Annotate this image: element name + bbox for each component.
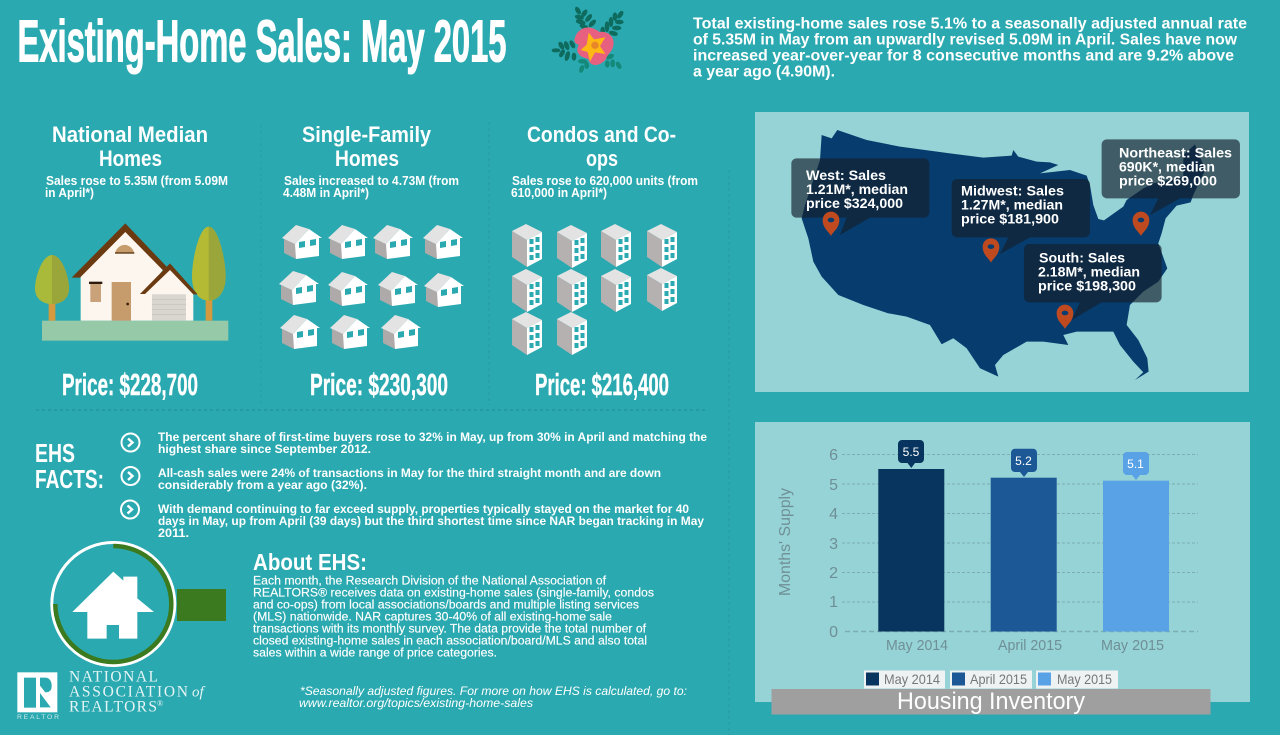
label: northeast: price $269,000	[1119, 174, 1217, 188]
heading: Homes	[99, 146, 162, 171]
association name: NATIONAL	[69, 669, 158, 686]
panel: condos and co-ops	[511, 122, 698, 402]
intro text: Total existing-home sales rose 5.1% to a seasonally adjusted annual rate	[693, 16, 1247, 32]
heading	[527, 122, 676, 171]
icon: house in ring	[52, 542, 226, 666]
footnote: www.realtor.org/topics/existing-home-sales	[299, 696, 533, 710]
panel: about EHS	[253, 549, 654, 660]
price: Price: $230,300	[310, 367, 448, 402]
bar: May 2015	[1103, 452, 1169, 632]
fact list: 2011.	[158, 526, 189, 540]
intro text: a year ago (4.90M).	[693, 64, 835, 80]
label: west: 1.21M*, median	[806, 182, 908, 197]
callout: midwest	[952, 179, 1090, 254]
fact list: highest share since September 2012.	[158, 442, 371, 456]
label: northeast	[1119, 146, 1232, 188]
sales text	[283, 173, 459, 200]
heading: National Median	[52, 122, 208, 147]
x axis labels	[886, 637, 1164, 654]
fact list: All-cash sales were 24% of transactions in May for the third straight month and are down	[158, 466, 661, 480]
legend: May 2014	[884, 671, 940, 687]
sales text	[511, 173, 698, 200]
legend: May 2015	[1057, 671, 1112, 687]
label: midwest: Midwest: Sales	[961, 184, 1064, 198]
y axis title: Months' Supply	[777, 488, 794, 596]
price: Price: $216,400	[535, 367, 669, 402]
pin: midwest	[983, 238, 999, 263]
about text: (MLS) nationwide. NAR captures 30-40% of all existing-home sale	[253, 610, 612, 624]
callout: west	[791, 158, 929, 235]
fact list: considerably from a year ago (32%).	[158, 478, 367, 492]
panel: EHS facts	[35, 430, 707, 540]
callout: northeast	[1102, 139, 1240, 215]
heading	[302, 122, 432, 171]
legend	[864, 670, 1118, 688]
panel: single-family homes	[279, 122, 464, 402]
label: midwest: price $181,900	[961, 212, 1059, 226]
label: south: price $198,300	[1038, 278, 1136, 294]
bar: May 2014	[878, 440, 944, 632]
about text: and co-ops) from local associations/boards and multiple listing services	[253, 598, 639, 612]
y axis labels: 4	[829, 506, 838, 523]
intro text: of 5.35M in May from an upwardly revised 5.09M in April. Sales have now	[693, 32, 1238, 48]
chart title band	[772, 688, 1210, 715]
heading: Condos and Co-	[527, 122, 676, 147]
y axis labels: 6	[829, 447, 838, 464]
sales text: Sales rose to 620,000 units (from	[512, 173, 698, 188]
callout: south	[1024, 244, 1162, 320]
icon: house pictogram grid	[279, 225, 464, 349]
y axis labels: 3	[829, 536, 838, 553]
sales text	[45, 173, 228, 200]
intro text: increased year-over-year for 8 consecutive months and are 9.2% above	[693, 48, 1234, 64]
heading: ops	[586, 146, 618, 171]
sales text: 610,000 in April*)	[511, 185, 607, 200]
fact list	[158, 430, 707, 540]
y axis labels: 0	[829, 624, 838, 641]
panel: housing inventory chart	[755, 422, 1250, 715]
bar: April 2015	[991, 449, 1057, 632]
bar: May 2014: 5.5	[903, 445, 920, 459]
x axis labels: May 2015	[1101, 637, 1164, 654]
label: south	[1038, 250, 1140, 294]
bar: May 2015: 5.1	[1127, 457, 1144, 471]
x axis labels: April 2015	[998, 637, 1062, 654]
fact list: days in May, up from April (39 days) but the third shortest time since NAR began tracking in May	[158, 514, 704, 528]
fact list: The percent share of first-time buyers rose to 32% in May, up from 30% in April and matching the	[158, 430, 707, 444]
y axis labels: 5	[829, 477, 838, 494]
heading: FACTS:	[35, 464, 104, 494]
sales text: in April*)	[45, 185, 94, 200]
y axis labels: 2	[829, 565, 838, 582]
heading: About EHS:	[253, 549, 367, 575]
association name: REALTORS	[69, 699, 157, 716]
heading	[35, 438, 104, 494]
heading	[52, 122, 208, 171]
sales text: Sales rose to 5.35M (from 5.09M	[46, 173, 228, 188]
label: northeast: 690K*, median	[1119, 160, 1215, 174]
chart title band: Housing Inventory	[897, 688, 1085, 715]
intro text	[693, 16, 1247, 80]
label: northeast: Northeast: Sales	[1119, 146, 1232, 160]
y axis labels	[829, 447, 838, 641]
association name: ASSOCIATION	[69, 684, 188, 701]
panel: regional map	[755, 112, 1249, 392]
about text: REALTORS® receives data on existing-home sales (single-family, condos	[253, 586, 654, 600]
about text: transactions with its monthly survey. The data provide the total number of	[253, 622, 647, 636]
label: south: 2.18M*, median	[1038, 264, 1140, 280]
legend: April 2015	[970, 671, 1027, 687]
y axis labels: 1	[829, 594, 838, 611]
footnote: *Seasonally adjusted figures. For more on how EHS is calculated, go to:	[300, 684, 687, 698]
icon: building pictogram grid	[512, 224, 677, 355]
heading: Homes	[335, 146, 399, 171]
icon: house with trees	[35, 223, 228, 341]
about text: Each month, the Research Division of the National Association of	[253, 574, 607, 588]
association name: ®	[157, 699, 163, 708]
about text: closed existing-home sales in each association/board/MLS and also total	[253, 634, 647, 648]
realtor wordmark: REALTOR	[17, 714, 59, 721]
sales text: 4.48M in April*)	[283, 185, 369, 200]
icon: realtor R block	[17, 672, 57, 712]
pin: south	[1057, 305, 1073, 329]
sales text: Sales increased to 4.73M (from	[284, 173, 459, 188]
footnote	[299, 684, 687, 710]
label: west: price $324,000	[806, 196, 903, 211]
x axis labels: May 2014	[886, 637, 948, 654]
map: continental US	[802, 130, 1206, 380]
heading: EHS	[35, 438, 75, 468]
about text	[253, 574, 654, 660]
panel: national median homes	[35, 122, 228, 402]
about text: sales within a wide range of price categories.	[253, 646, 497, 660]
pin: northeast	[1133, 212, 1149, 236]
icon: flower	[552, 7, 624, 73]
price: Price: $228,700	[62, 367, 198, 402]
title: Existing-Home Sales: May 2015	[18, 8, 506, 74]
pin: west	[823, 212, 839, 236]
label: midwest: 1.27M*, median	[961, 198, 1063, 212]
heading: Single-Family	[302, 122, 432, 147]
fact list: With demand continuing to far exceed supply, properties typically stayed on the market for 40	[158, 502, 689, 516]
logo: National Association of Realtors	[17, 669, 206, 721]
bar: April 2015: 5.2	[1015, 454, 1032, 468]
label: midwest	[961, 184, 1064, 226]
label: west	[806, 168, 908, 211]
label: west: West: Sales	[806, 168, 886, 183]
label: south: South: Sales	[1039, 250, 1125, 266]
icon: chevron bullets	[121, 434, 140, 518]
association name: of	[192, 685, 206, 701]
association name	[69, 669, 206, 716]
